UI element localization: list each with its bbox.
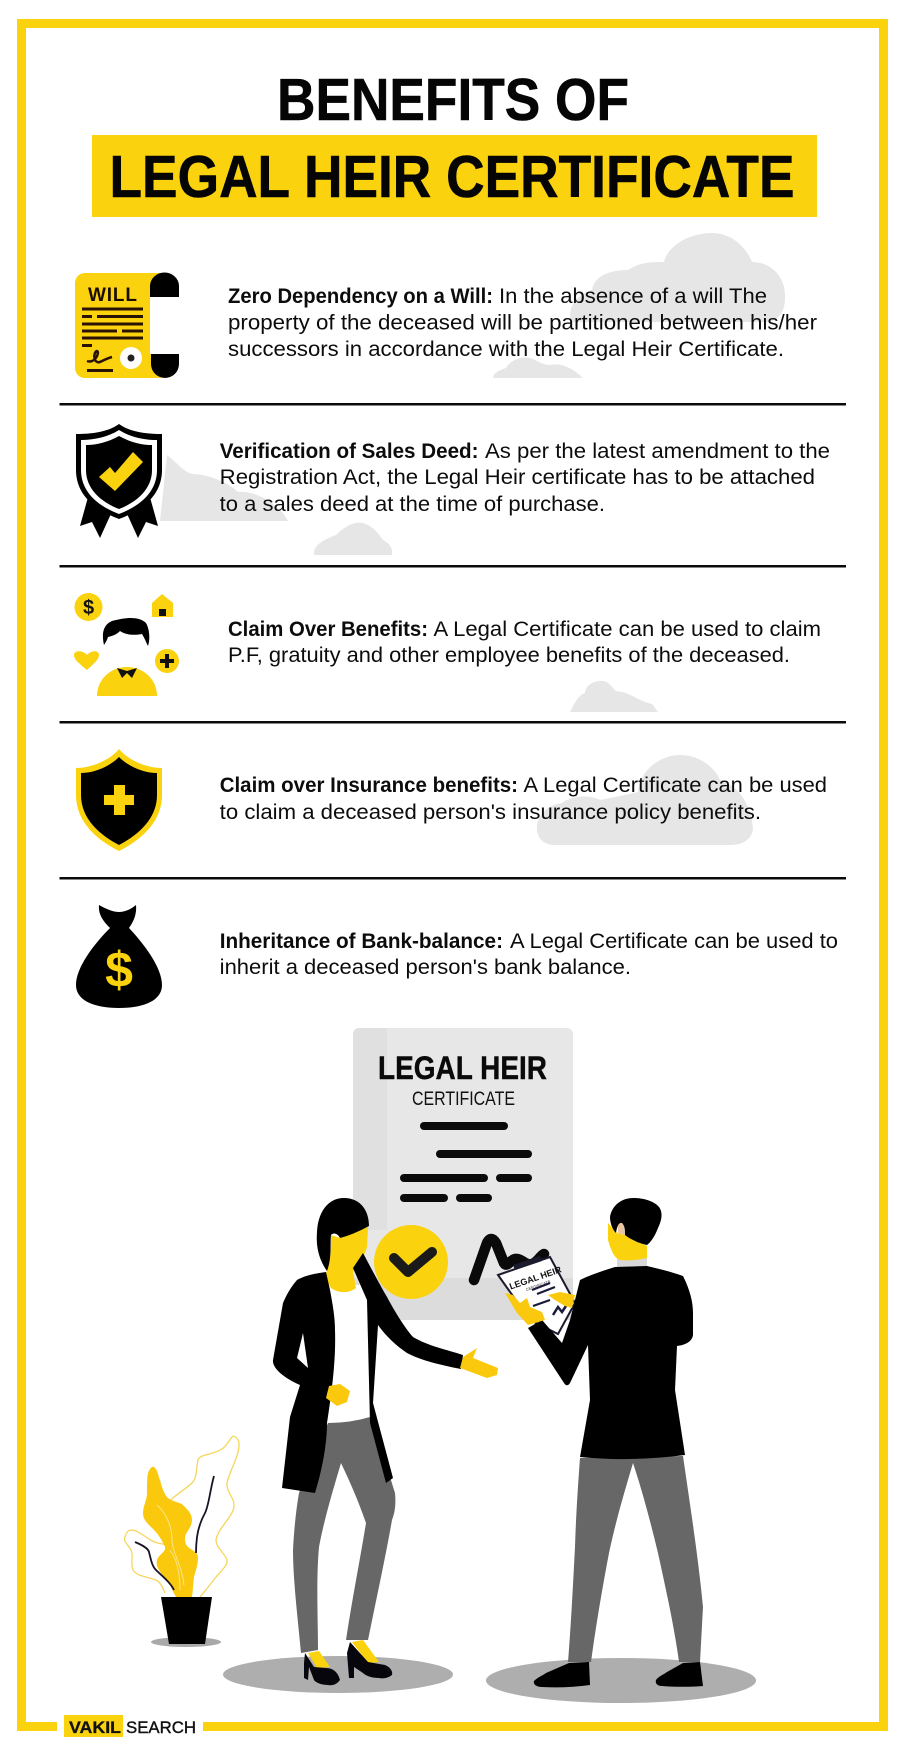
text: inheritance of bank balance: Inheritance of Bank-balance: bbox=[220, 930, 503, 953]
woman: shoes bbox=[304, 1640, 392, 1685]
clipboard: CERTIFICATE bbox=[525, 1279, 552, 1292]
text: verification of sales deed: Registration Act, the Legal Heir certificate has to be attached bbox=[220, 466, 815, 489]
panel: zero dependency on a will bbox=[75, 273, 817, 378]
illustration: certificate document: CERTIFICATE bbox=[412, 1089, 515, 1110]
panel: claim over insurance benefits bbox=[76, 749, 827, 851]
text: inheritance of bank balance: inherit a deceased person's bank balance. bbox=[220, 956, 631, 979]
text: claim over benefits: Claim Over Benefits: bbox=[228, 618, 428, 641]
icon: will scroll bbox=[75, 273, 179, 378]
text: verification of sales deed bbox=[220, 440, 830, 516]
woman: hair bbox=[317, 1198, 369, 1271]
text: inheritance of bank balance bbox=[220, 930, 838, 979]
woman: face and neck bbox=[326, 1227, 368, 1292]
illustration: woman bbox=[223, 1198, 498, 1693]
icon: person with benefits: $ bbox=[83, 597, 94, 619]
title: LEGAL HEIR CERTIFICATE bbox=[110, 144, 794, 210]
title bbox=[92, 67, 817, 217]
icon: will scroll: WILL bbox=[88, 285, 137, 306]
text: claim over insurance: A Legal Certificate can be used bbox=[524, 774, 827, 797]
clipboard bbox=[498, 1256, 575, 1334]
text: claim over benefits bbox=[228, 618, 821, 667]
text: verification of sales deed: Verification of Sales Deed: bbox=[220, 440, 478, 463]
logo: Vakil Search bbox=[64, 1715, 196, 1737]
man: jacket bbox=[528, 1266, 693, 1459]
text: zero dependency: In the absence of a will The bbox=[499, 285, 767, 308]
panel: verification of sales deed bbox=[76, 424, 830, 538]
text: zero dependency: property of the deceased will be partitioned between his/her bbox=[228, 312, 817, 334]
icon: money bag bbox=[76, 905, 162, 1008]
icon: money bag: $ bbox=[105, 942, 133, 998]
illustration: certificate document bbox=[353, 1028, 573, 1320]
text: verification of sales deed: As per the latest amendment to the bbox=[485, 440, 830, 463]
text: verification of sales deed: to a sales deed at the time of purchase. bbox=[220, 493, 605, 516]
text: claim over insurance bbox=[220, 774, 827, 824]
text: zero dependency bbox=[228, 285, 817, 361]
woman: trousers bbox=[293, 1417, 395, 1653]
logo: Vakil Search: VAKIL bbox=[69, 1718, 121, 1737]
illustration: man bbox=[486, 1198, 756, 1703]
man: shoes bbox=[534, 1662, 703, 1687]
text: claim over insurance: to claim a deceased person's insurance policy benefits. bbox=[220, 801, 761, 824]
panel: claim over benefits bbox=[74, 593, 821, 696]
icon: shield with plus bbox=[76, 749, 162, 851]
man: neck, face and ear bbox=[608, 1223, 647, 1268]
logo: Vakil Search: SEARCH bbox=[126, 1718, 196, 1737]
text: zero dependency: Zero Dependency on a Will: bbox=[228, 285, 493, 308]
illustration: plant in pot bbox=[125, 1436, 239, 1647]
man: hands bbox=[505, 1292, 575, 1325]
icon: person with benefits bbox=[74, 593, 179, 696]
text: zero dependency: successors in accordance with the Legal Heir Certificate. bbox=[228, 338, 784, 361]
icon: shield with check bbox=[76, 424, 162, 538]
woman: coat bbox=[273, 1253, 463, 1493]
text: claim over benefits: P.F, gratuity and other employee benefits of the deceased. bbox=[228, 644, 790, 667]
illustration: certificate document: LEGAL HEIR bbox=[378, 1050, 547, 1086]
text: inheritance of bank balance: A Legal Certificate can be used to bbox=[510, 930, 838, 953]
text: claim over benefits: A Legal Certificate can be used to claim bbox=[434, 618, 821, 641]
floor shadow: woman bbox=[223, 1656, 453, 1693]
floor shadow: man bbox=[486, 1658, 756, 1703]
woman: shirt bbox=[328, 1285, 372, 1424]
clipboard: LEGAL HEIR bbox=[508, 1264, 563, 1292]
man: trousers bbox=[568, 1456, 703, 1662]
text: claim over insurance: Claim over Insurance benefits: bbox=[220, 774, 518, 797]
panel: inheritance of bank balance bbox=[76, 905, 838, 1008]
title: BENEFITS OF bbox=[277, 67, 629, 133]
man: hair bbox=[610, 1198, 662, 1245]
woman: hands bbox=[326, 1348, 498, 1406]
background clouds bbox=[160, 233, 785, 845]
